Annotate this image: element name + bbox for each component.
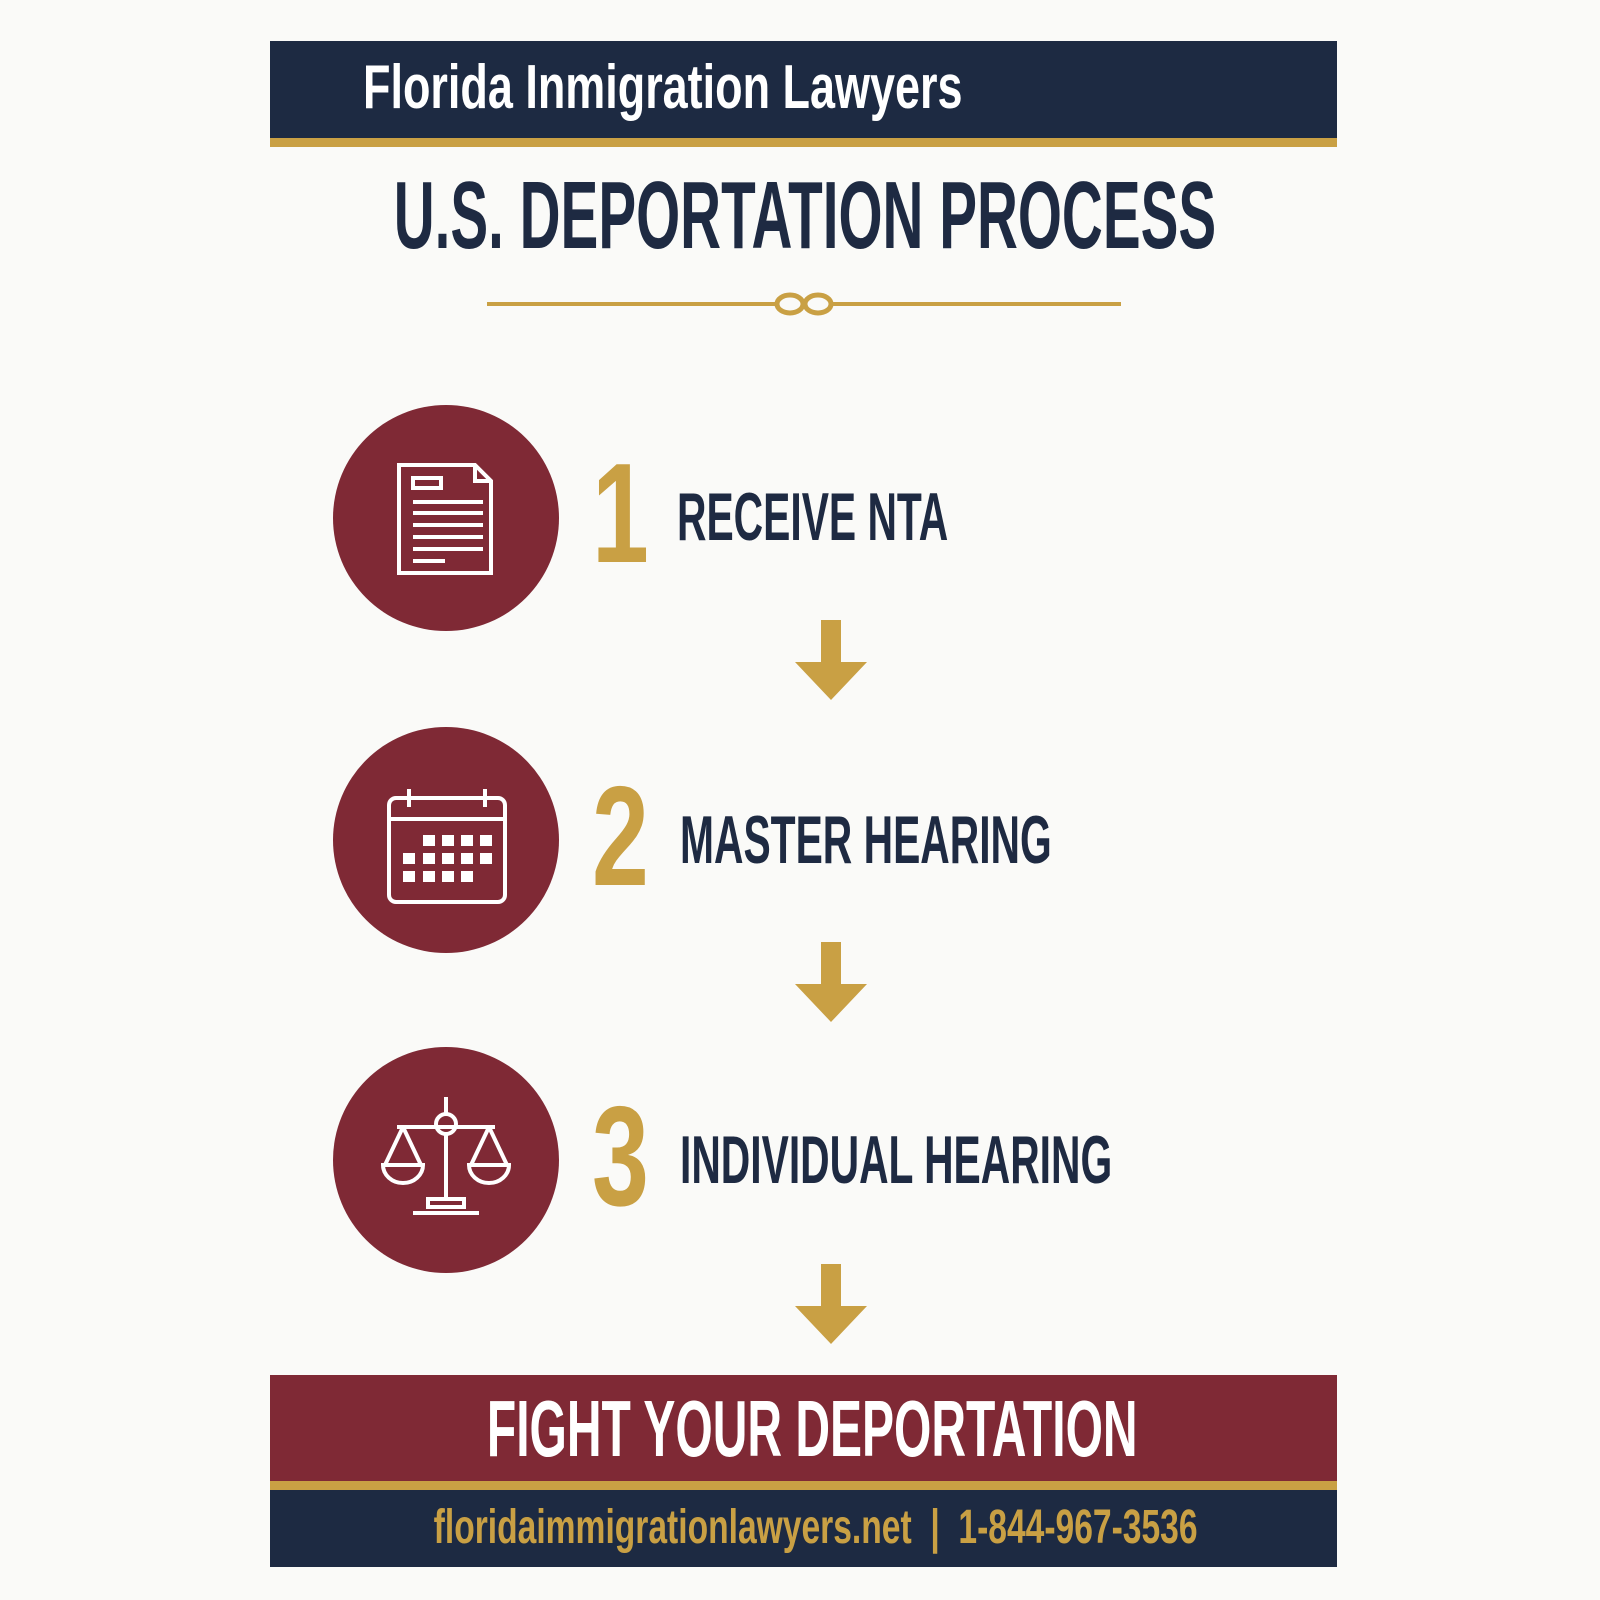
icon: scales bbox=[333, 1047, 559, 1273]
header text: Florida Inmigration Lawyers bbox=[363, 53, 962, 122]
arrow 1 bbox=[795, 620, 867, 700]
ornament divider bbox=[487, 292, 1121, 316]
number 3: 3 bbox=[592, 1077, 649, 1236]
step 2 bbox=[333, 727, 1052, 953]
title: U.S. DEPORTATION PROCESS bbox=[394, 162, 1216, 269]
label: RECEIVE NTA bbox=[677, 479, 948, 555]
call to action banner bbox=[270, 1375, 1337, 1481]
icon: document bbox=[333, 405, 559, 631]
number 1: 1 bbox=[592, 434, 649, 593]
number 2: 2 bbox=[592, 757, 649, 916]
icon: calendar bbox=[333, 727, 559, 953]
arrow 2 bbox=[795, 942, 867, 1022]
cta text: FIGHT YOUR DEPORTATION bbox=[487, 1384, 1138, 1473]
contact text: floridaimmigrationlawyers.net | 1-844-967-3536 bbox=[434, 1501, 1198, 1554]
footer contact bbox=[270, 1490, 1337, 1567]
label: INDIVIDUAL HEARING bbox=[680, 1122, 1112, 1198]
arrow 3 bbox=[795, 1264, 867, 1344]
label: MASTER HEARING bbox=[680, 802, 1052, 878]
step 1 bbox=[333, 405, 948, 631]
step 3 bbox=[333, 1047, 1112, 1273]
header band bbox=[270, 41, 1337, 147]
